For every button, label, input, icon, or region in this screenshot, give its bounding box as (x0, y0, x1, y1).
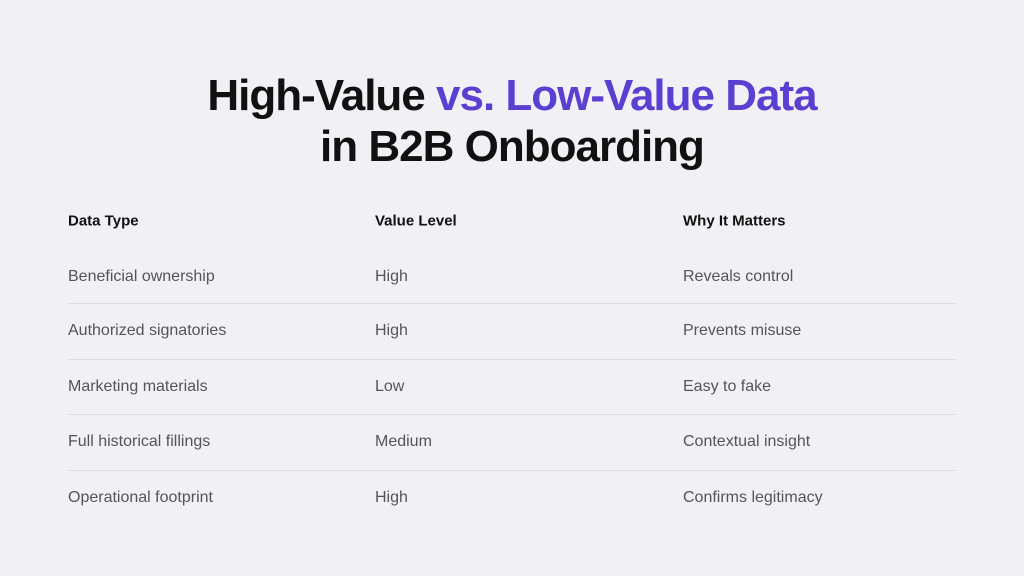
row: beneficial ownership: High (375, 268, 408, 285)
row: authorized signatories (68, 304, 956, 360)
row: operational footprint: Operational footprint (68, 489, 213, 506)
row: marketing materials: Low (375, 378, 404, 395)
row: historical fillings (68, 415, 956, 471)
row: beneficial ownership (68, 237, 956, 304)
row: operational footprint: Confirms legitimacy (683, 489, 823, 506)
row: operational footprint: High (375, 489, 408, 506)
header row: Value Level (375, 212, 457, 229)
row: operational footprint (68, 489, 823, 506)
row: historical fillings: Full historical fillings (68, 433, 210, 450)
row: beneficial ownership: Reveals control (683, 268, 793, 285)
header row: Why It Matters (683, 212, 786, 229)
row: authorized signatories: Prevents misuse (683, 322, 801, 339)
row: marketing materials (68, 360, 956, 415)
row: historical fillings: Medium (375, 433, 432, 450)
row: marketing materials: Marketing materials (68, 378, 208, 395)
row: authorized signatories: Authorized signatories (68, 322, 226, 339)
title (207, 71, 818, 171)
row: beneficial ownership: Beneficial ownership (68, 268, 215, 285)
header row (68, 212, 786, 229)
row: authorized signatories: High (375, 322, 408, 339)
title: High-Value vs. Low-Value Data (207, 71, 817, 120)
row: marketing materials: Easy to fake (683, 378, 771, 395)
header row: Data Type (68, 212, 139, 229)
table (68, 212, 956, 506)
row: historical fillings: Contextual insight (683, 433, 810, 450)
title: in B2B Onboarding (320, 122, 704, 171)
